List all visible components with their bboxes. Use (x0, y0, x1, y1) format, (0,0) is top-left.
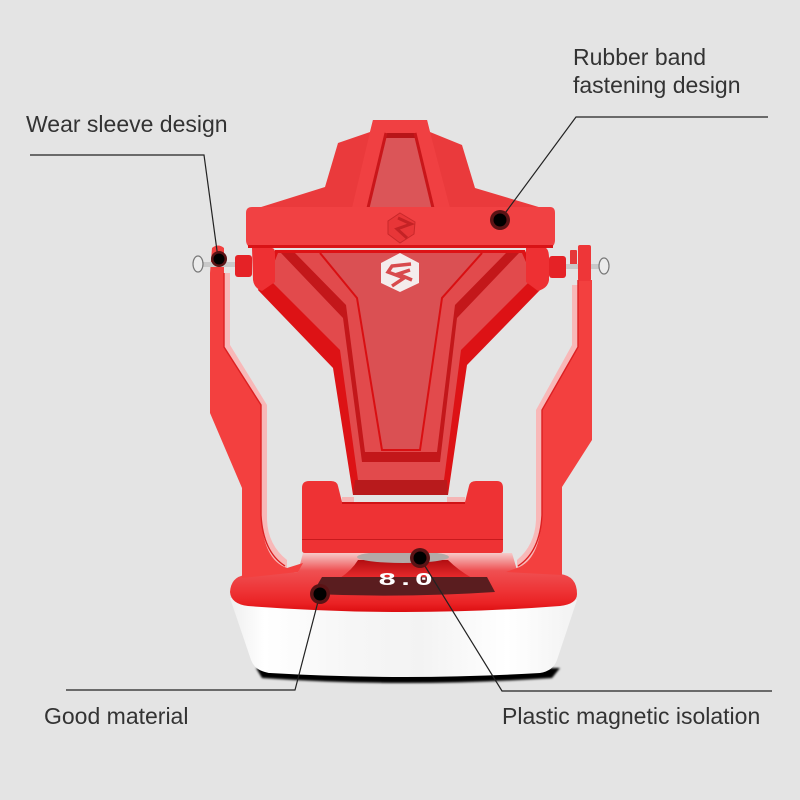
right arm ghost reflection (517, 285, 578, 570)
red base top (230, 553, 577, 612)
left screw (193, 256, 240, 272)
wear sleeve leader line (30, 155, 218, 258)
good material marker (310, 584, 330, 604)
callout: plastic magnetic isolation (410, 548, 772, 729)
left arm ghost reflection (224, 273, 287, 570)
white base body (230, 598, 577, 677)
good material leader line (66, 594, 320, 690)
speed display: 8.0 (378, 571, 433, 591)
right arm (506, 280, 592, 575)
phone holder (302, 481, 503, 553)
callout: rubber band fastening design (490, 44, 768, 230)
plastic isolation leader line (420, 558, 772, 691)
left arm (210, 246, 303, 578)
right screw (565, 258, 609, 274)
pedestal (340, 551, 472, 578)
plastic isolation marker (410, 548, 430, 568)
top clamp back (258, 120, 542, 208)
rubber band leader line (500, 117, 768, 220)
product: phone swing stand (193, 120, 609, 683)
wear sleeve marker (211, 251, 227, 267)
wear sleeve label: Wear sleeve design (26, 111, 228, 137)
control panel (312, 577, 495, 596)
good material label: Good material (44, 703, 188, 729)
clamp logo (388, 213, 415, 243)
callout: rubber band fastening design: fastening design (573, 72, 741, 98)
right hinge (526, 248, 566, 291)
right arm sleeve (570, 245, 591, 281)
callout: wear sleeve design (26, 111, 228, 267)
base shadow (256, 668, 560, 683)
panel logo (381, 253, 419, 292)
rubber band label: Rubber band (573, 44, 706, 70)
clamp band (246, 207, 555, 248)
plastic isolation label: Plastic magnetic isolation (502, 703, 760, 729)
callout: good material (44, 584, 330, 729)
lower phone panel (258, 250, 540, 495)
left hinge (235, 248, 275, 291)
rubber band marker (490, 210, 510, 230)
